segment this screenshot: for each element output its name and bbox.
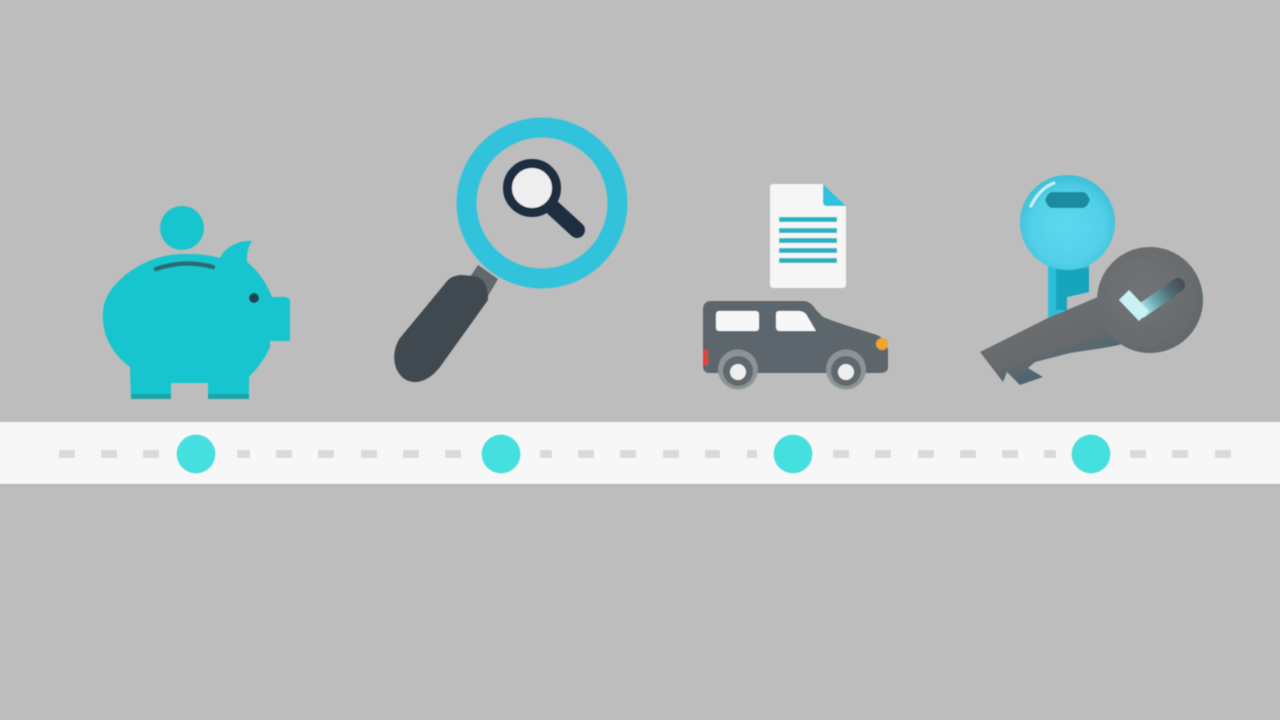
key hole: [1045, 192, 1090, 208]
key highlight: [1031, 183, 1054, 206]
car body: [703, 301, 888, 373]
timeline band: [0, 422, 1280, 486]
timeline marker 2: [482, 434, 520, 474]
timeline dashes: [59, 450, 1231, 458]
document text lines: [779, 217, 837, 263]
car headlight: [876, 338, 888, 350]
pig feet shading: [131, 394, 249, 399]
icon: gray key with check mark: [980, 247, 1203, 385]
magnifier ring: [466, 128, 618, 278]
magnifier grip: [394, 275, 488, 382]
timeline marker 3: [774, 434, 812, 474]
check mark: [1124, 285, 1178, 316]
magnifier neck: [468, 265, 498, 296]
icon: document: [770, 184, 846, 288]
icon: coin: [160, 206, 204, 250]
car tail light: [703, 350, 708, 365]
icon: car: [703, 301, 888, 390]
icon: piggy bank with coin: [103, 206, 290, 399]
pig eye: [249, 293, 259, 303]
icon: blue key: [1020, 175, 1115, 320]
car windows: [716, 311, 759, 331]
car wheels: [718, 350, 758, 390]
icon: large magnifying glass: [394, 128, 618, 382]
timeline marker 1: [176, 434, 216, 474]
icon: pig body: [103, 241, 290, 399]
document corner fold: [823, 184, 846, 206]
timeline marker 4: [1072, 434, 1110, 474]
icon: small magnifier: [508, 164, 577, 230]
pig coin slot: [156, 263, 213, 269]
